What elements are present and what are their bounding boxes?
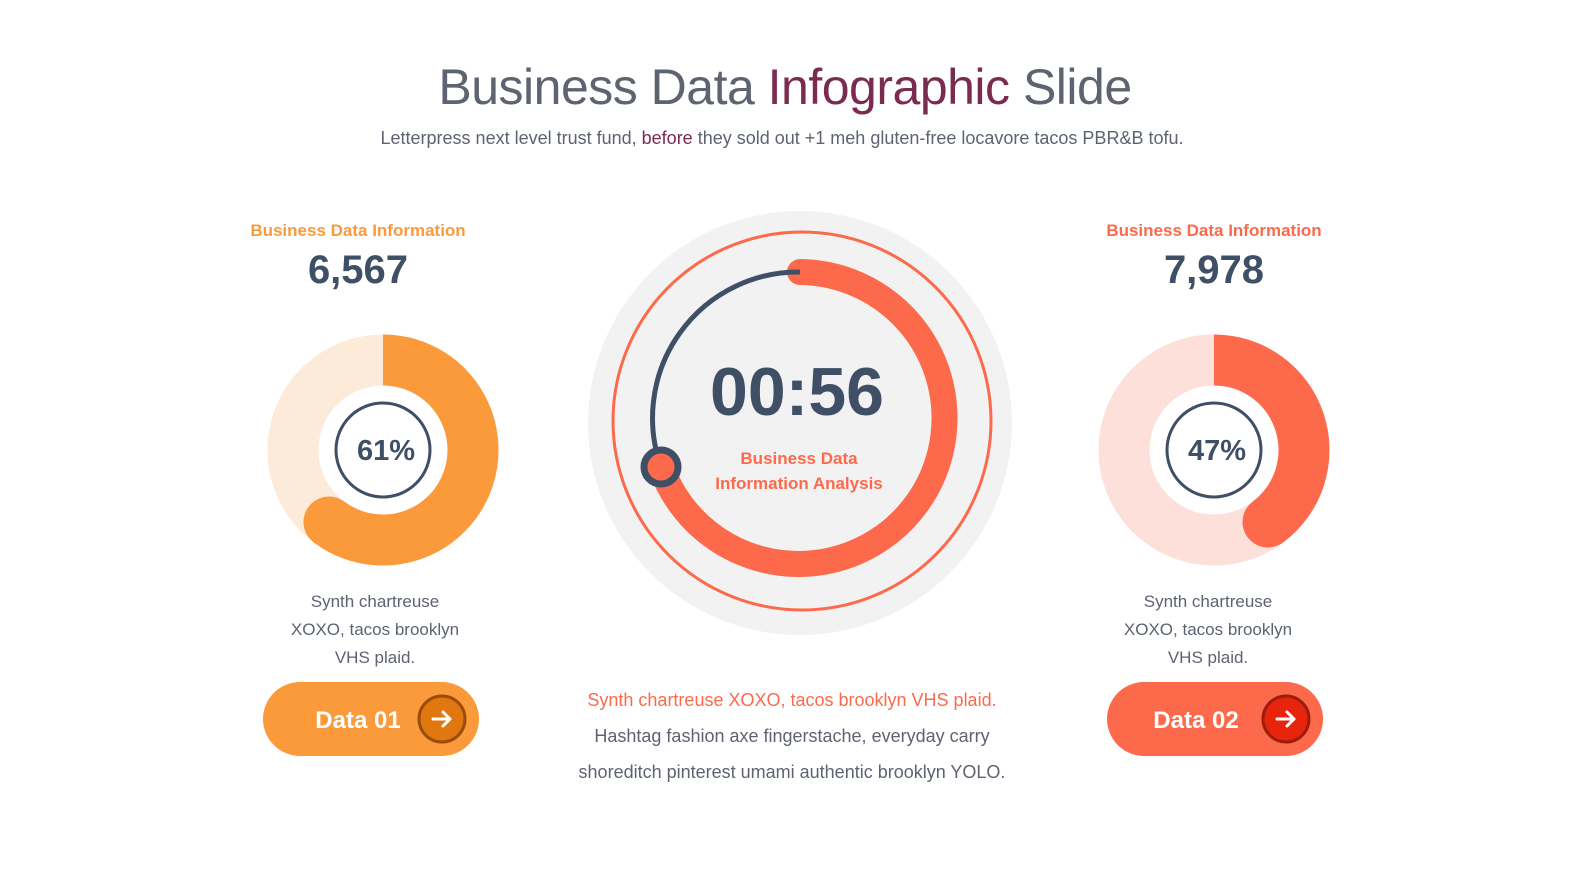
center description: Synth chartreuse XOXO, tacos brooklyn VHS plaid.: [587, 690, 997, 710]
left caption: Synth chartreuse: [311, 592, 439, 611]
button: Data 02: [1107, 682, 1323, 756]
button: Data 01: [263, 682, 479, 756]
right caption: VHS plaid.: [1168, 648, 1248, 667]
left caption: [291, 592, 459, 667]
button: Data 01: Data 01: [315, 707, 401, 734]
right number: 7,978: [1164, 248, 1264, 292]
title: Business Data Infographic Slide: [438, 59, 1132, 115]
center timer: Information Analysis: [715, 474, 883, 493]
donut: left 61%: 61%: [357, 435, 415, 467]
right caption: [1124, 592, 1292, 667]
right heading: Business Data Information: [1106, 221, 1322, 240]
left caption: VHS plaid.: [335, 648, 415, 667]
donut: left 61%: [293, 360, 473, 548]
right caption: XOXO, tacos brooklyn: [1124, 620, 1292, 639]
left number: 6,567: [308, 248, 408, 292]
center timer: 00:56: [710, 354, 884, 430]
button: Data 02: Data 02: [1153, 707, 1239, 734]
center description: shoreditch pinterest umami authentic brooklyn YOLO.: [579, 762, 1005, 782]
right caption: Synth chartreuse: [1144, 592, 1272, 611]
donut: right 47%: [1124, 360, 1304, 548]
donut: right 47%: 47%: [1188, 435, 1246, 467]
center timer: [588, 211, 1012, 635]
left heading: Business Data Information: [250, 221, 466, 240]
center timer: Business Data: [740, 449, 858, 468]
center description: [579, 690, 1005, 782]
subtitle: Letterpress next level trust fund, before they sold out +1 meh gluten-free locavore tacos PBR&B tofu.: [381, 128, 1183, 148]
left caption: XOXO, tacos brooklyn: [291, 620, 459, 639]
center description: Hashtag fashion axe fingerstache, everyday carry: [594, 726, 990, 746]
